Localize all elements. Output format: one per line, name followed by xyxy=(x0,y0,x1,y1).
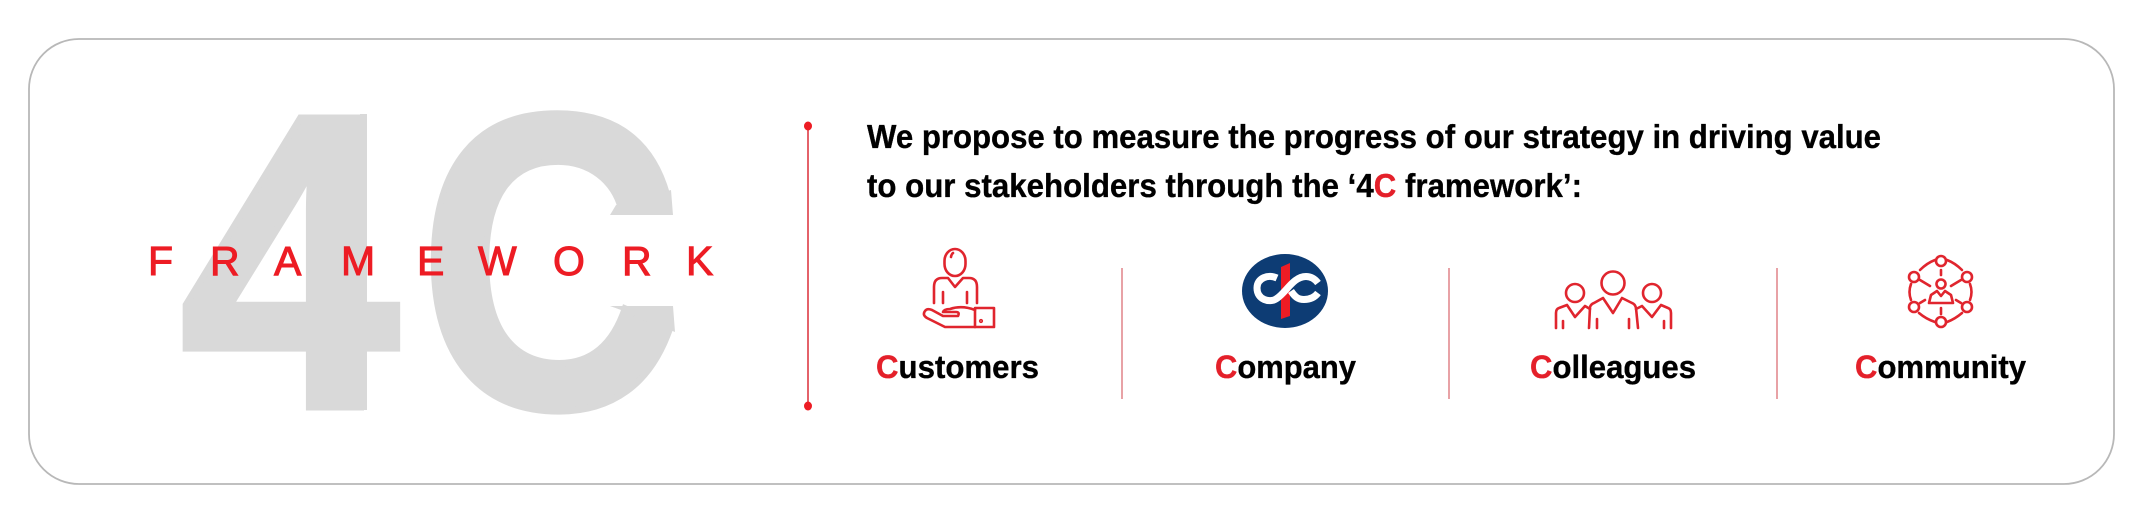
big 4C heading: C xyxy=(419,28,680,497)
divider 2 xyxy=(1448,268,1450,399)
big 4C heading: 4 xyxy=(180,28,401,497)
big 4C heading xyxy=(180,28,680,497)
intro text xyxy=(867,118,1881,204)
framework label: FRAMEWORK xyxy=(148,238,713,284)
icon: colleagues xyxy=(1556,272,1671,328)
icon: community xyxy=(1909,256,1972,327)
icon: customers xyxy=(924,249,994,327)
icon: company logo xyxy=(1242,254,1328,328)
intro text: We propose to measure the progress of our strategy in driving value xyxy=(867,118,1881,155)
intro text: to our stakeholders through the ‘4C framework’: xyxy=(867,167,1582,204)
vertical timeline divider xyxy=(804,122,812,410)
divider 3 xyxy=(1776,268,1778,399)
company label: Company xyxy=(1215,349,1356,385)
colleagues label: Colleagues xyxy=(1530,349,1696,385)
customers label: Customers xyxy=(876,349,1039,385)
community label: Community xyxy=(1855,349,2026,385)
divider 1 xyxy=(1121,268,1123,399)
